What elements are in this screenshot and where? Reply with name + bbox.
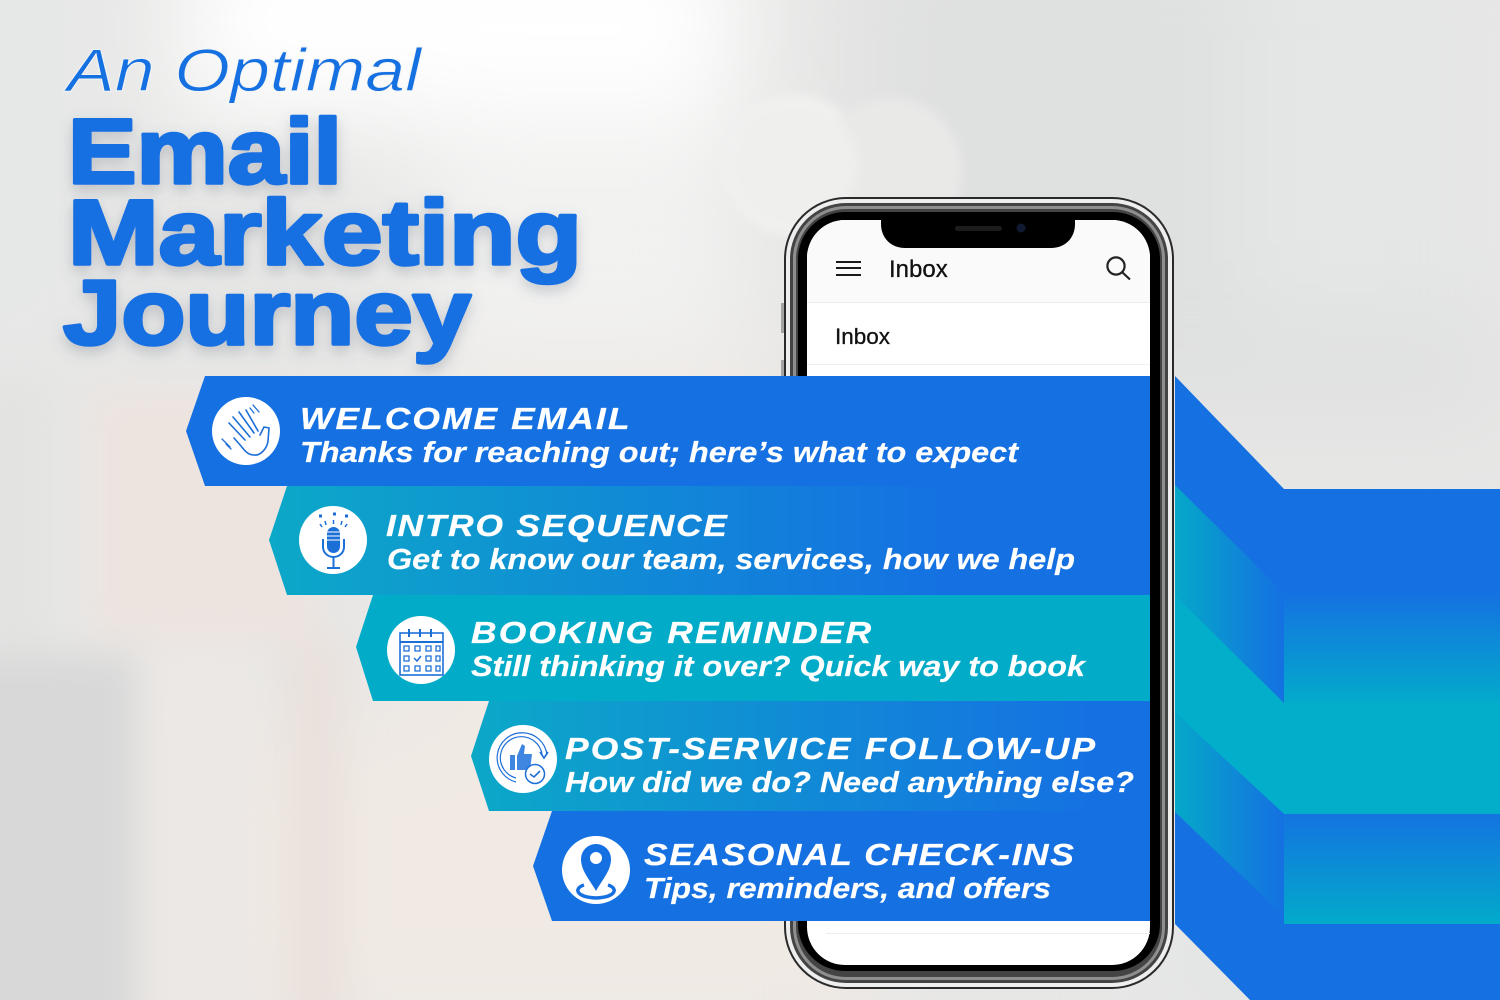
step 4 bar: post-service follow-up: How did we do? Need anything else? bbox=[565, 767, 1134, 799]
title: main lines: Email bbox=[68, 101, 342, 203]
title: main lines bbox=[63, 101, 582, 364]
step 5 bar: seasonal check-ins: Tips, reminders, and offers bbox=[644, 873, 1051, 905]
phone body bbox=[784, 197, 1174, 989]
text: intro sequence: INTRO SEQUENCE bbox=[386, 509, 728, 543]
step 3 bar: booking reminder bbox=[356, 595, 1150, 701]
text: seasonal check-ins: SEASONAL CHECK-INS bbox=[644, 838, 1074, 872]
title bbox=[63, 37, 582, 364]
icon: thumbs up with check bbox=[489, 725, 557, 793]
ribbon: right teal block bbox=[1284, 703, 1500, 814]
icon: microphone bbox=[299, 506, 367, 574]
step 2 bar: intro sequence bbox=[269, 486, 1150, 595]
phone screen bbox=[807, 220, 1150, 965]
step 1 bar: welcome email bbox=[186, 376, 1150, 486]
step 4 bar: post-service follow-up bbox=[471, 701, 1150, 811]
icon: search bbox=[1107, 257, 1130, 280]
text: booking reminder: BOOKING REMINDER bbox=[471, 616, 871, 650]
step 3 bar: booking reminder: Still thinking it over? Quick way to book bbox=[471, 651, 1087, 683]
title: intro line: An Optimal bbox=[63, 37, 423, 104]
ribbon: right lower gradient block bbox=[1284, 814, 1500, 924]
ribbon: third fold bbox=[1175, 595, 1284, 814]
icon: waving hand bbox=[212, 397, 280, 465]
ribbon backdrop on the right bbox=[1175, 376, 1500, 1000]
phone notch bbox=[881, 218, 1075, 248]
ribbon: fourth fold bbox=[1175, 713, 1284, 916]
app header bbox=[807, 220, 1150, 302]
ribbon: right block gradient to teal bbox=[1284, 590, 1500, 710]
icon: hamburger menu bbox=[836, 261, 861, 276]
title: main lines: Journey bbox=[63, 262, 471, 364]
step 1 bar: welcome email: Thanks for reaching out; here’s what to expect bbox=[300, 437, 1019, 469]
heading: inbox header: Inbox bbox=[889, 256, 948, 283]
text: inbox label: Inbox bbox=[835, 324, 891, 349]
ribbon: second fold bbox=[1175, 485, 1284, 703]
icon: calendar bbox=[387, 616, 455, 684]
ribbon: blue top band and block bbox=[1175, 376, 1500, 1000]
text: post-service follow-up: POST-SERVICE FOLLOW-UP bbox=[565, 732, 1096, 766]
step 5 bar: seasonal check-ins bbox=[533, 811, 1150, 921]
phone side buttons bbox=[781, 303, 784, 390]
text: welcome email: WELCOME EMAIL bbox=[300, 402, 629, 436]
phone mockup bbox=[781, 197, 1174, 989]
step 2 bar: intro sequence: Get to know our team, services, how we help bbox=[387, 544, 1075, 576]
title: main lines: Marketing bbox=[68, 182, 582, 284]
icon: location pin bbox=[562, 836, 630, 904]
